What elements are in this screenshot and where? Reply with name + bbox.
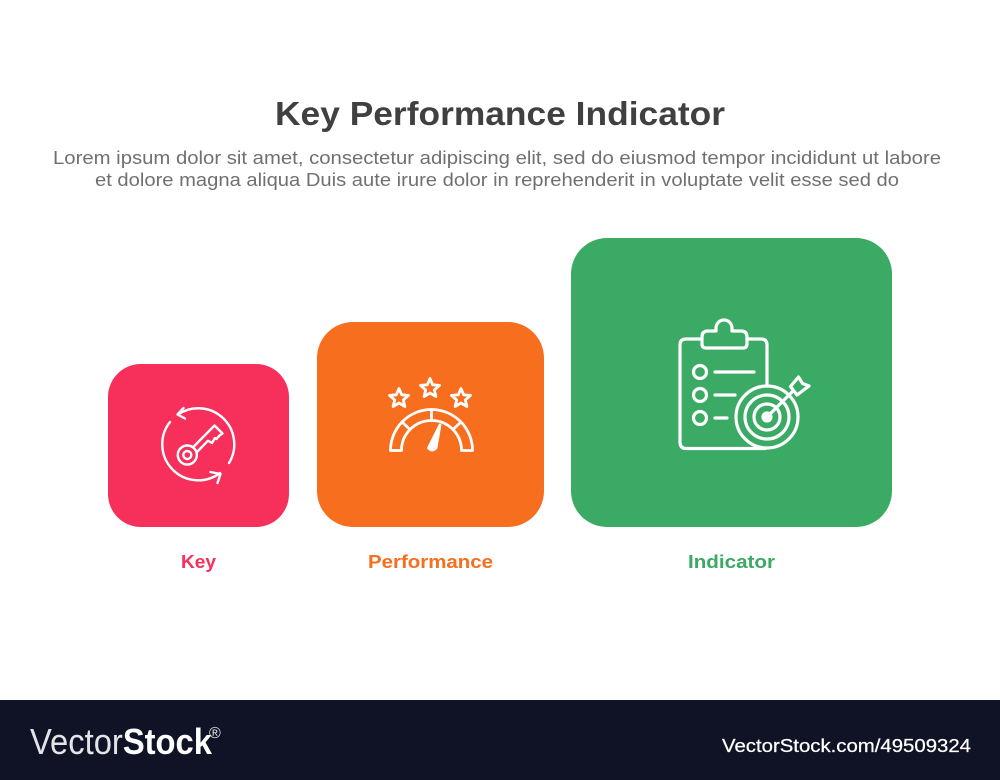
icon: key with cycle arrows <box>162 408 234 483</box>
subtitle text block: et dolore magna aliqua Duis aute irure dolor in reprehenderit in voluptate velit esse sed do <box>95 170 899 190</box>
panel: key <box>108 364 289 527</box>
icon: clipboard with target <box>680 320 809 448</box>
footer bar <box>0 700 1000 780</box>
footer image id: VectorStock.com/49509324 <box>722 736 971 756</box>
label: performance: Performance <box>368 551 493 572</box>
panel: indicator <box>571 238 892 527</box>
footer registered mark: ® <box>209 725 221 742</box>
icon: speedometer with stars <box>390 378 472 450</box>
title: Key Performance Indicator <box>275 95 725 132</box>
label: indicator: Indicator <box>688 551 775 572</box>
panel: performance <box>317 322 544 527</box>
subtitle text block <box>53 148 941 190</box>
label: key: Key <box>181 551 217 572</box>
footer logo: VectorStock <box>30 721 213 762</box>
subtitle text block: Lorem ipsum dolor sit amet, consectetur adipiscing elit, sed do eiusmod tempor incididunt ut labore <box>53 148 941 168</box>
